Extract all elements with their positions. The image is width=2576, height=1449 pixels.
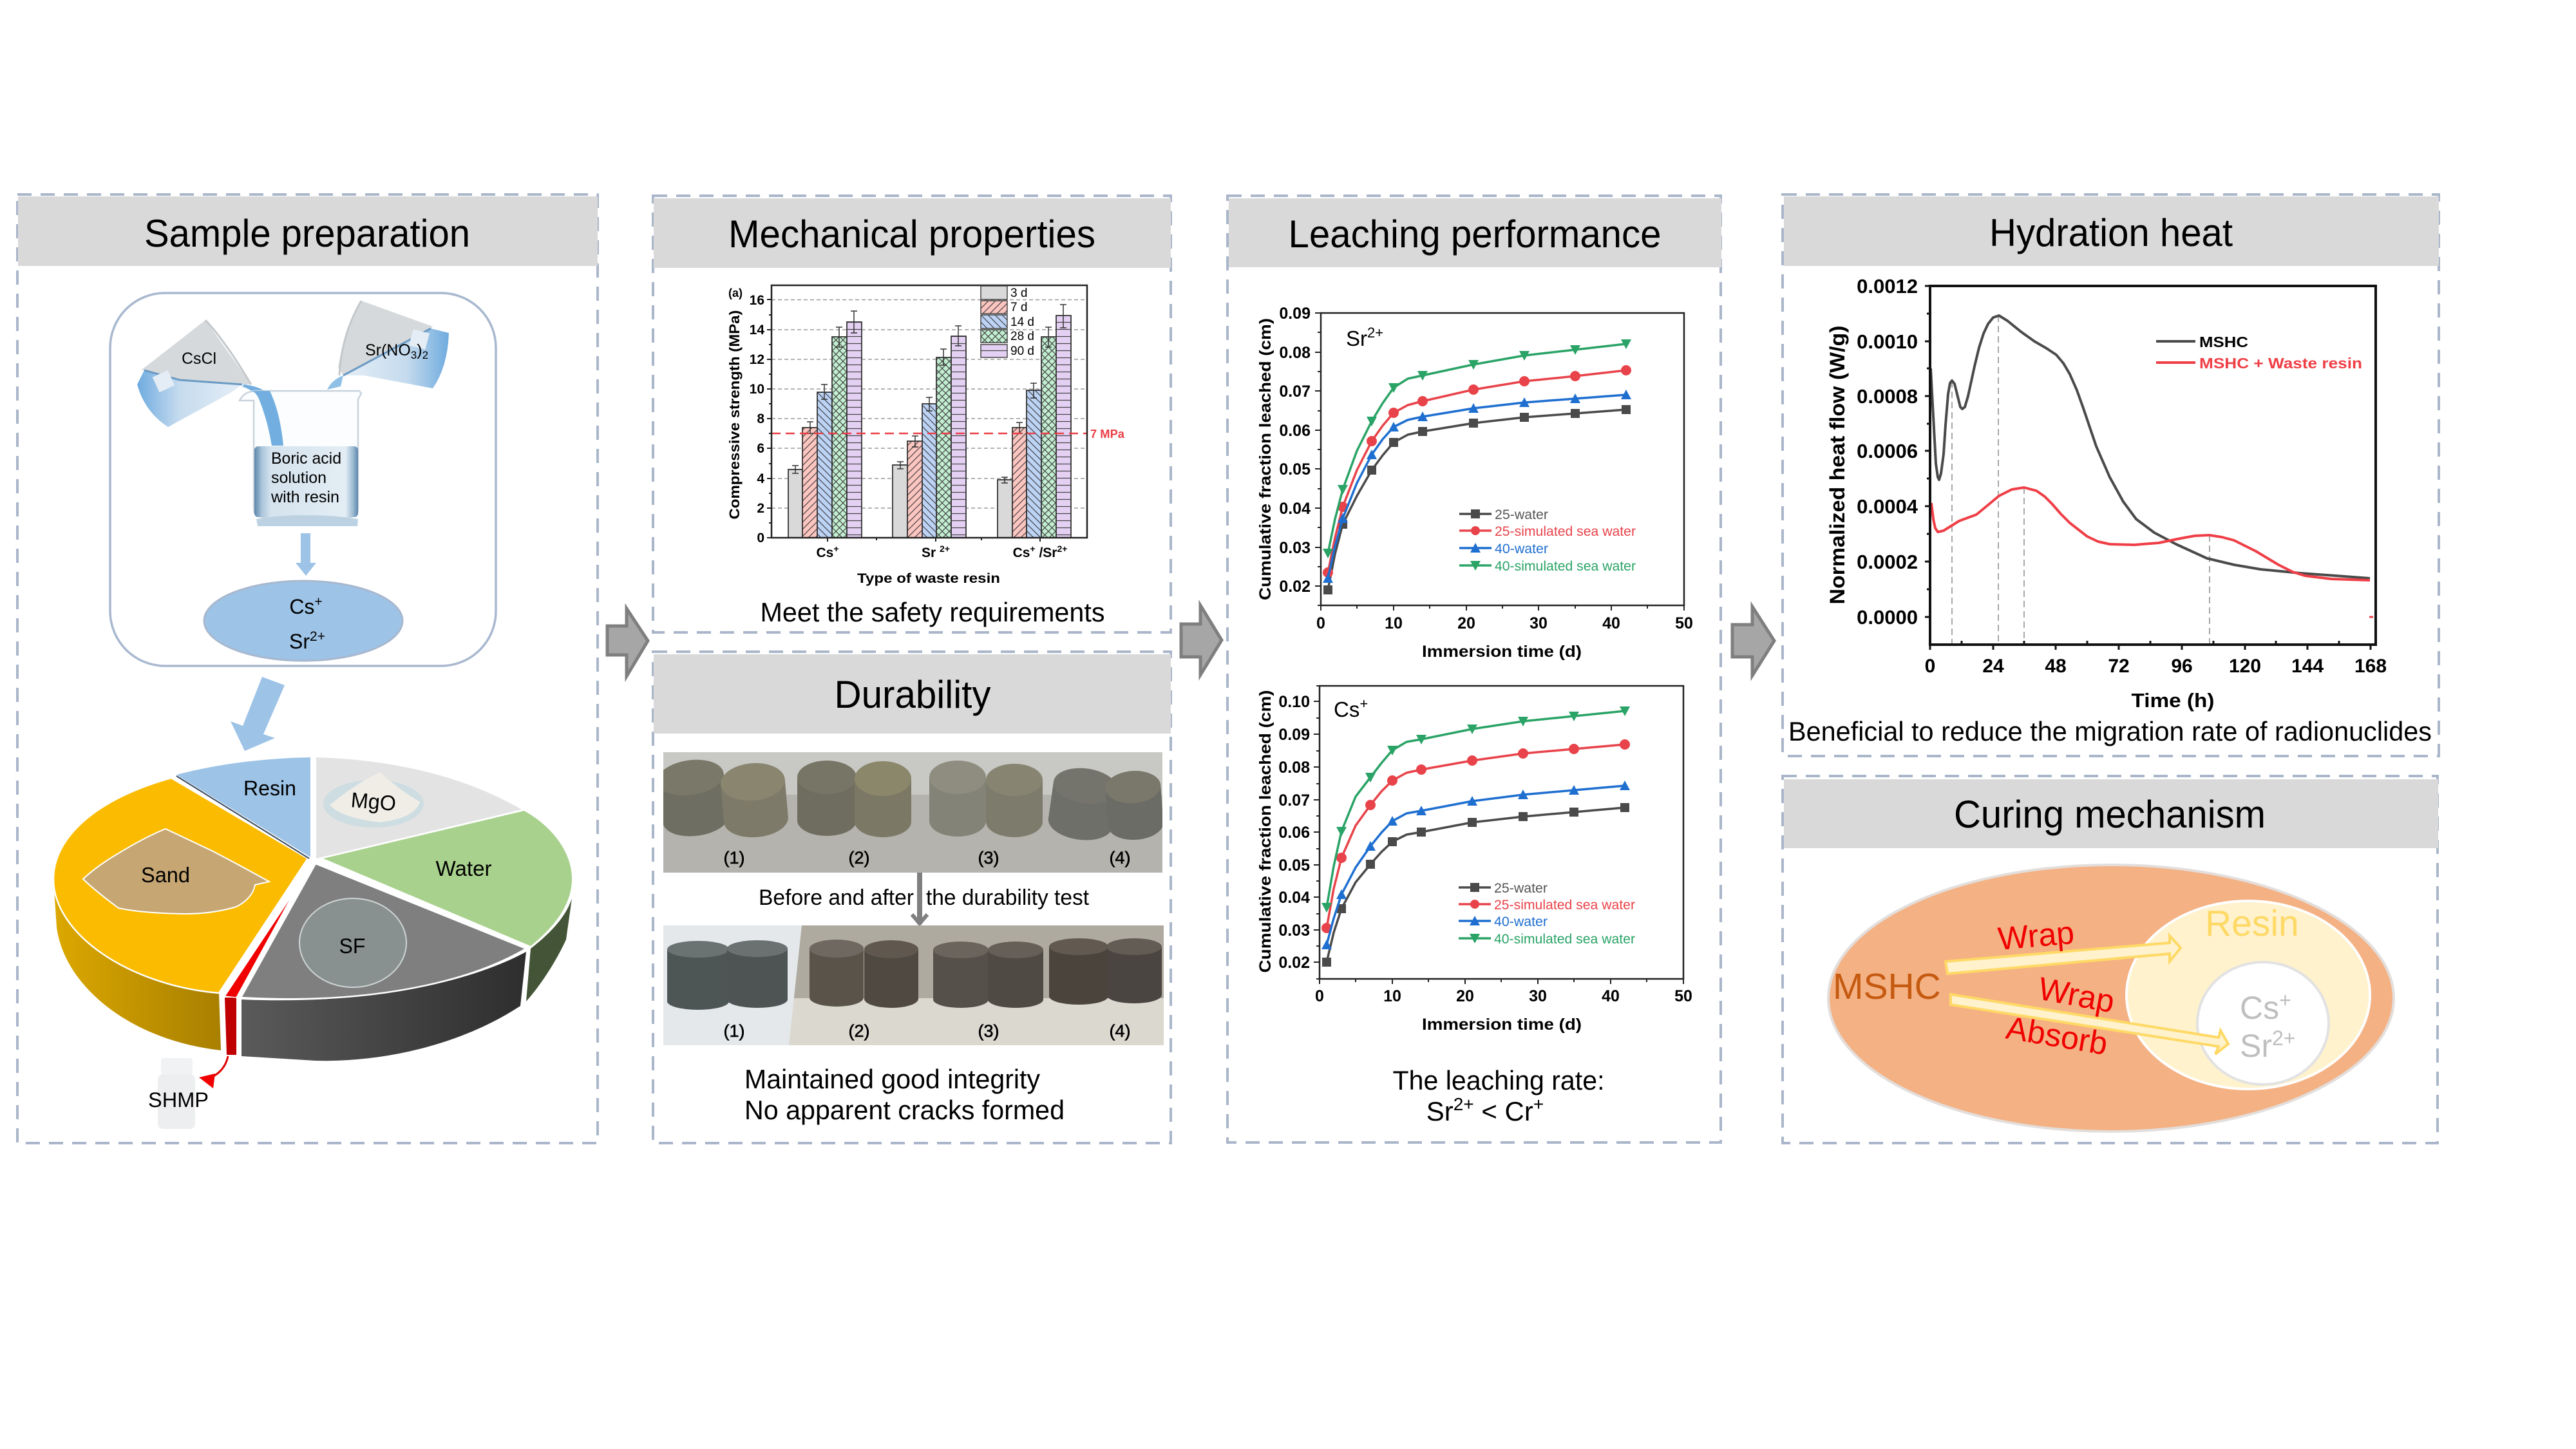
icon: central beaker with boric acid solution: Boric acid [271, 450, 341, 468]
legend: MSHC + Waste resin [2199, 355, 2362, 372]
icon: left pouring beaker CsCl: CsCl [182, 350, 216, 368]
line chart: Cs+ leaching [1256, 686, 1692, 1034]
legend: curing ages: 28 d [1010, 330, 1034, 343]
label: resin: Resin [2205, 903, 2299, 944]
y tick labels: 0.06 [1279, 422, 1311, 440]
y tick labels: 0.0002 [1857, 551, 1918, 573]
x tick labels: 0 [1925, 656, 1935, 677]
pie slice: SF [241, 864, 526, 999]
rounded box: ion solution [110, 293, 496, 666]
axis labels: strength ticks: 8 [757, 412, 764, 426]
y tick labels: 0.0006 [1857, 440, 1918, 462]
axis categories: Sr [922, 545, 936, 560]
ellipse: Cs+ and Sr2+ ions: Sr [289, 630, 310, 653]
icon: right pouring beaker Sr(NO3)2: 3 [411, 349, 417, 361]
conclusion: integrity [744, 1064, 1065, 1125]
heading: sample preparation: Sample preparation [144, 212, 470, 255]
y tick labels: 0.04 [1278, 889, 1310, 907]
conclusion: leaching rate: < Cr [1474, 1096, 1533, 1126]
panel: leaching performance [1227, 196, 1721, 1142]
panel: sample preparation [17, 194, 598, 1143]
pie slice: sand [53, 778, 308, 993]
chart: 3D pie of mix components [53, 757, 572, 1061]
x tick labels [1316, 614, 1693, 632]
bars: Cs+/Sr2+ [998, 316, 1071, 538]
x tick labels: 24 [1982, 656, 2004, 677]
conclusion: leaching rate: + [1533, 1094, 1544, 1114]
series: 40-simulated sea water [1328, 344, 1626, 553]
conclusion: safety: Meet the safety requirements [760, 597, 1105, 627]
y tick labels: 0.04 [1279, 500, 1311, 518]
icon: SHMP bottle: SHMP [148, 1088, 209, 1112]
panel: durability [653, 652, 1171, 1143]
icon: right pouring beaker Sr(NO3)2: ) [417, 341, 422, 359]
x tick labels [1925, 656, 2387, 677]
legend [1459, 881, 1635, 947]
y tick labels: 0.08 [1278, 759, 1310, 777]
ellipse: Cs+ and Sr2+ ions: 2+ [310, 629, 325, 644]
axis title: type of waste resin: Type of waste resin [857, 571, 1000, 586]
photo: samples after test: (4) [1109, 1021, 1131, 1041]
icon: SHMP bottle [148, 1058, 209, 1129]
label: wrap 2: Wrap [2036, 971, 2117, 1019]
panel: mechanical properties [653, 196, 1171, 632]
heading: leaching performance: Leaching performance [1288, 213, 1662, 256]
label: ions: Sr [2240, 1028, 2272, 1064]
x tick labels: 30 [1529, 987, 1547, 1005]
arrow: MSHC wraps and absorbs ions [1951, 994, 2228, 1054]
pie slice: MgO: MgO [350, 788, 397, 815]
y tick labels: 0.0010 [1857, 330, 1918, 353]
axis categories: 2+ [1057, 544, 1067, 554]
label: absorb: Absorb [2003, 1010, 2110, 1062]
series: 25-simulated sea water [1327, 744, 1625, 928]
caption: before and after: Before and after [759, 886, 914, 910]
legend: curing ages: 7 d [1010, 301, 1027, 314]
heading: hydration heat: Hydration heat [1989, 211, 2233, 254]
y tick labels: 0.0004 [1857, 495, 1918, 518]
legend: 40-water [1495, 542, 1548, 556]
line chart: normalized heat flow [1826, 275, 2387, 712]
pie slice: MgO [316, 757, 522, 858]
y tick labels: 0.0012 [1857, 275, 1918, 298]
y tick labels: 0.09 [1279, 305, 1311, 323]
pie slice: water: Water [435, 857, 492, 880]
label: ions [2240, 989, 2295, 1064]
arrow: preparation to properties [607, 609, 648, 676]
legend: curing ages: 90 d [1010, 345, 1034, 358]
legend: MSHC [2199, 334, 2248, 350]
conclusion: leaching rate: The leaching rate: [1392, 1065, 1605, 1095]
legend [1459, 507, 1636, 574]
threshold line: 7 MPa: 7 MPa [1090, 428, 1125, 440]
legend: 25-water [1494, 881, 1548, 896]
x tick labels: 120 [2229, 656, 2261, 677]
y tick labels: 0.10 [1278, 693, 1310, 711]
label: Sr2+: 2+ [1367, 325, 1383, 341]
axis labels: strength ticks: 10 [750, 382, 764, 397]
legend: curing ages [981, 286, 1034, 358]
legend: curing ages: 3 d [1010, 287, 1027, 300]
conclusion: leaching rate [1392, 1065, 1605, 1126]
conclusion: integrity: No apparent cracks formed [744, 1095, 1065, 1125]
axis categories: Cs [1013, 545, 1030, 560]
label: ions: + [2279, 989, 2291, 1012]
axis categories: + [1030, 544, 1036, 554]
pie slice: resin: Resin [243, 777, 296, 800]
photo: samples before test [655, 752, 1164, 873]
legend: 25-water [1495, 507, 1548, 522]
line chart: Sr2+ leaching [1256, 305, 1693, 661]
icon: right pouring beaker Sr(NO3)2: 2 [422, 349, 428, 361]
y tick labels: 0.08 [1279, 344, 1311, 362]
x tick labels: 40 [1602, 987, 1620, 1005]
legend: 40-water [1494, 914, 1548, 929]
caption: before and after: the durability test [926, 886, 1090, 910]
x tick labels: 72 [2108, 656, 2130, 677]
y tick labels [1857, 275, 1918, 629]
pie slice: resin [176, 757, 310, 858]
label: Sr2+: Sr [1346, 327, 1367, 350]
arrow: SHMP slice to bottle [199, 1056, 228, 1088]
heading: mechanical properties: Mechanical properties [728, 213, 1095, 256]
conclusion: integrity: Maintained good integrity [744, 1064, 1040, 1094]
icon: right pouring beaker Sr(NO3)2: Sr(NO [365, 341, 411, 359]
x tick labels: 40 [1602, 614, 1620, 632]
y tick labels: 0.02 [1279, 578, 1311, 596]
photo: samples after test: (3) [978, 1021, 999, 1041]
series: 25-simulated sea water [1328, 370, 1626, 573]
ellipse: ion core [2197, 962, 2329, 1084]
y tick labels: 0.05 [1278, 857, 1310, 875]
icon: central beaker with boric acid solution: with resin [270, 488, 339, 506]
x tick labels: 20 [1457, 614, 1475, 632]
photo: samples after test: (2) [849, 1021, 869, 1041]
ellipse: MSHC matrix [1828, 865, 2394, 1132]
axis categories: + [833, 544, 839, 554]
ellipse: Cs+ and Sr2+ ions [204, 581, 402, 661]
conclusion: leaching rate: Sr [1426, 1096, 1454, 1126]
series: MSHC + waste resin [1931, 488, 2370, 580]
label: MSHC: MSHC [1833, 966, 1941, 1007]
heading: durability: Durability [835, 673, 990, 716]
axis title: cumulative fraction: Cumulative fraction leached (cm) [1256, 318, 1274, 600]
x tick labels: 10 [1383, 987, 1401, 1005]
icon: left pouring beaker CsCl [137, 320, 283, 444]
y tick labels: 0.05 [1279, 460, 1311, 478]
x tick labels: 50 [1675, 614, 1693, 632]
ellipse: resin [2126, 901, 2370, 1089]
axis labels: strength ticks: 12 [750, 352, 764, 367]
axis labels: strength ticks: 16 [750, 293, 764, 308]
axis title: compressive strength: Compressive strength (MPa) [726, 310, 743, 519]
axis labels: strength ticks: 4 [757, 471, 764, 486]
axis labels: strength ticks: 6 [757, 441, 764, 456]
axis title: heat flow: Normalized heat flow (W/g) [1826, 325, 1849, 605]
bars: Cs+ [788, 322, 862, 538]
y tick labels: 0.07 [1278, 791, 1310, 810]
label: ions: Cs [2240, 990, 2279, 1026]
panel: hydration heat [1783, 194, 2439, 756]
photo: samples before test: (3) [978, 848, 999, 867]
series: 40-simulated sea water [1327, 711, 1625, 907]
label: panel letter a: (a) [728, 287, 743, 299]
arrow: properties to leaching [1181, 605, 1222, 675]
legend: 25-simulated sea water [1494, 898, 1635, 913]
icon: right pouring beaker Sr(NO3)2 [323, 301, 449, 436]
axis title: immersion time: Immersion time (d) [1422, 1016, 1582, 1034]
x tick labels: 20 [1456, 987, 1474, 1005]
x tick labels: 0 [1316, 614, 1325, 632]
axis categories: 2+ [940, 544, 950, 554]
y tick labels: 0.07 [1279, 383, 1311, 401]
axis categories: Cs [816, 545, 833, 560]
ellipse: Cs+ and Sr2+ ions: Cs [289, 595, 314, 618]
label: Cs+: + [1359, 696, 1368, 712]
legend: 40-simulated sea water [1495, 559, 1636, 574]
y tick labels: 0.06 [1278, 824, 1310, 842]
y tick labels: 0.0000 [1857, 606, 1918, 629]
label: wrap: Wrap [1996, 914, 2076, 957]
conclusion: leaching rate: 2+ [1454, 1094, 1474, 1114]
conclusion: migration rate: Beneficial to reduce the migration rate of radionuclides [1788, 716, 2432, 746]
photo: samples before test: (2) [849, 848, 869, 867]
x tick labels: 10 [1385, 614, 1403, 632]
label: ions: 2+ [2272, 1027, 2295, 1050]
bars: Sr2+ [893, 336, 966, 538]
label: Cs+: Cs [1334, 697, 1359, 721]
pie slice: water [323, 811, 572, 946]
axis labels: strength ticks: 2 [757, 501, 764, 516]
pie slice: SF: SF [339, 934, 365, 958]
arrow: ions into resin slice [231, 677, 285, 751]
series: 40-water [1327, 786, 1625, 945]
icon: central beaker with boric acid solution [240, 391, 361, 526]
y tick labels: 0.02 [1278, 954, 1310, 972]
heading: curing mechanism: Curing mechanism [1954, 793, 2266, 836]
bar chart: compressive strength [726, 285, 1125, 586]
y tick labels: 0.0008 [1857, 385, 1918, 408]
arrow: down to ions [296, 533, 316, 576]
series: 40-water [1328, 395, 1626, 578]
photo: samples before test: (1) [724, 848, 744, 867]
axis labels: strength ticks: 14 [750, 323, 764, 337]
diagram: nested MSHC, resin and ions [1828, 865, 2394, 1132]
ellipse: Cs+ and Sr2+ ions: + [314, 594, 323, 609]
icon: central beaker with boric acid solution: solution [271, 469, 327, 487]
series: 25-water [1328, 410, 1626, 590]
axis labels: strength ticks: 0 [757, 531, 764, 545]
axis title: cumulative fraction: Cumulative fraction leached (cm) [1256, 690, 1274, 973]
axis labels: strength ticks [750, 293, 764, 545]
y tick labels [1278, 693, 1310, 972]
legend: 40-simulated sea water [1494, 932, 1635, 947]
axis title: time: Time (h) [2132, 689, 2214, 712]
x tick labels: 144 [2291, 656, 2324, 677]
y tick labels [1279, 305, 1311, 596]
x tick labels: 96 [2171, 656, 2193, 677]
x tick labels: 48 [2045, 656, 2067, 677]
caption: before and after [759, 886, 1090, 910]
x tick labels: 30 [1530, 614, 1548, 632]
y tick labels: 0.03 [1278, 922, 1310, 940]
arrow: leaching to hydration [1732, 607, 1774, 676]
axis title: immersion time: Immersion time (d) [1422, 643, 1582, 661]
x tick labels: 50 [1674, 987, 1692, 1005]
photo: samples after test: (1) [724, 1021, 744, 1041]
x tick labels: 168 [2354, 656, 2387, 677]
arrow: MSHC wraps resin [1946, 936, 2181, 974]
pie slice: SHMP [225, 891, 295, 998]
panel: curing mechanism [1783, 776, 2438, 1143]
legend: 25-simulated sea water [1495, 524, 1636, 539]
axis categories [816, 544, 1067, 560]
legend [2156, 334, 2362, 372]
pie slice: sand: Sand [141, 863, 190, 887]
axis categories: /Sr [1036, 545, 1057, 560]
series: MSHC [1931, 316, 2370, 578]
x tick labels: 0 [1315, 987, 1324, 1005]
x tick labels [1315, 987, 1692, 1005]
photo: samples before test: (4) [1109, 848, 1131, 867]
photo: samples after test [663, 925, 1164, 1045]
arrow: before to after [912, 873, 927, 924]
legend: curing ages: 14 d [1010, 316, 1034, 329]
series: 25-water [1327, 808, 1625, 962]
y tick labels: 0.09 [1278, 726, 1310, 744]
y tick labels: 0.03 [1279, 539, 1311, 557]
